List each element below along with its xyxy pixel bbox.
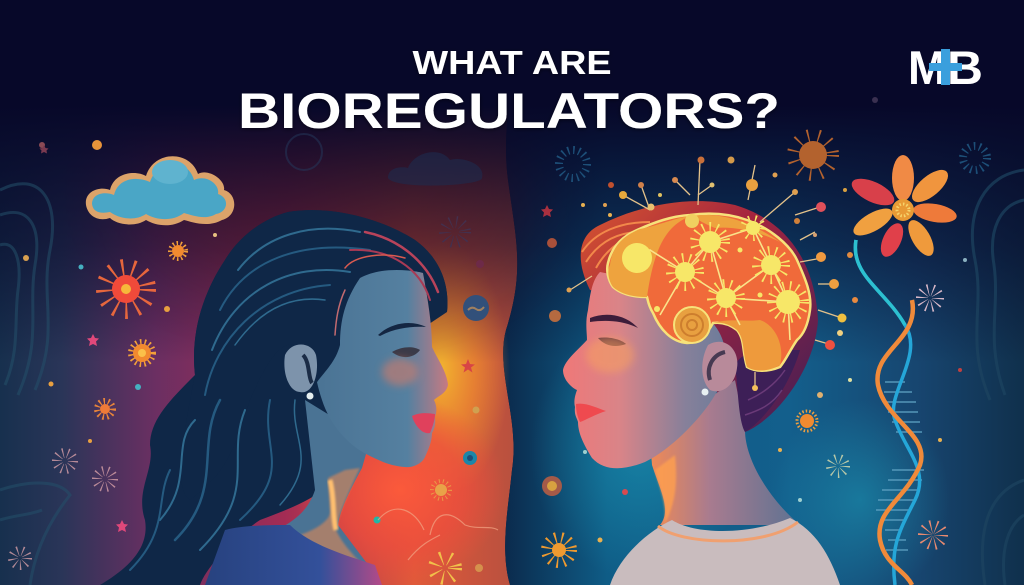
sun: orange middle <box>131 342 153 364</box>
lips <box>576 404 606 422</box>
synapse nodes <box>566 156 853 391</box>
cheek glow <box>382 358 418 386</box>
neuron suns <box>675 214 800 314</box>
ear <box>702 342 737 391</box>
DNA double helix <box>855 240 924 585</box>
spiral node <box>674 307 710 343</box>
right background particles <box>541 97 987 562</box>
back hair lower strands <box>735 349 800 432</box>
title <box>238 45 780 139</box>
sun: red large <box>106 269 146 309</box>
ear <box>284 344 317 392</box>
title line: bioregulators: BIOREGULATORS? <box>238 83 780 139</box>
side hair silhouettes right <box>972 170 1024 585</box>
forward hair overlay <box>181 210 448 500</box>
logo MHB <box>908 41 983 94</box>
neck <box>650 380 800 525</box>
neck glow <box>300 468 375 580</box>
earring <box>306 392 314 400</box>
woman left: hair behind, neck and face <box>100 210 448 585</box>
side hair silhouettes left <box>0 184 70 585</box>
faint dark clouds <box>286 134 482 186</box>
sun: small top <box>170 243 186 259</box>
woman right: head, neck and shirt <box>563 201 840 585</box>
eye <box>392 347 420 357</box>
neck <box>225 400 380 585</box>
small dots left <box>23 140 217 532</box>
star bursts pale <box>13 453 113 565</box>
earring <box>702 388 708 396</box>
neural links <box>637 228 790 340</box>
sun: lower left <box>97 401 113 417</box>
hair strands <box>130 229 438 570</box>
shirt <box>205 525 382 585</box>
neuron: large pale left <box>622 243 652 273</box>
shirt <box>610 518 840 585</box>
glowing brain <box>607 214 810 371</box>
neck glow <box>655 455 676 525</box>
planet <box>463 295 489 321</box>
eye <box>598 337 626 346</box>
face <box>563 272 726 468</box>
eyebrow <box>590 315 638 328</box>
logo MHB: M <box>908 41 946 94</box>
hair back <box>581 201 818 432</box>
hair back mass <box>100 210 448 585</box>
eyebrow <box>378 323 426 336</box>
lips <box>412 413 435 433</box>
left background particles and suns <box>13 140 217 565</box>
logo MHB: B <box>947 41 983 94</box>
flower with DNA stem <box>848 155 958 260</box>
synapse filaments around brain <box>570 160 842 388</box>
hair quiff strands <box>582 222 650 268</box>
cheek glow <box>586 337 634 373</box>
title line: what are: WHAT ARE <box>412 45 612 82</box>
centre particles <box>374 222 498 578</box>
face <box>313 262 448 467</box>
cloud <box>86 156 234 225</box>
